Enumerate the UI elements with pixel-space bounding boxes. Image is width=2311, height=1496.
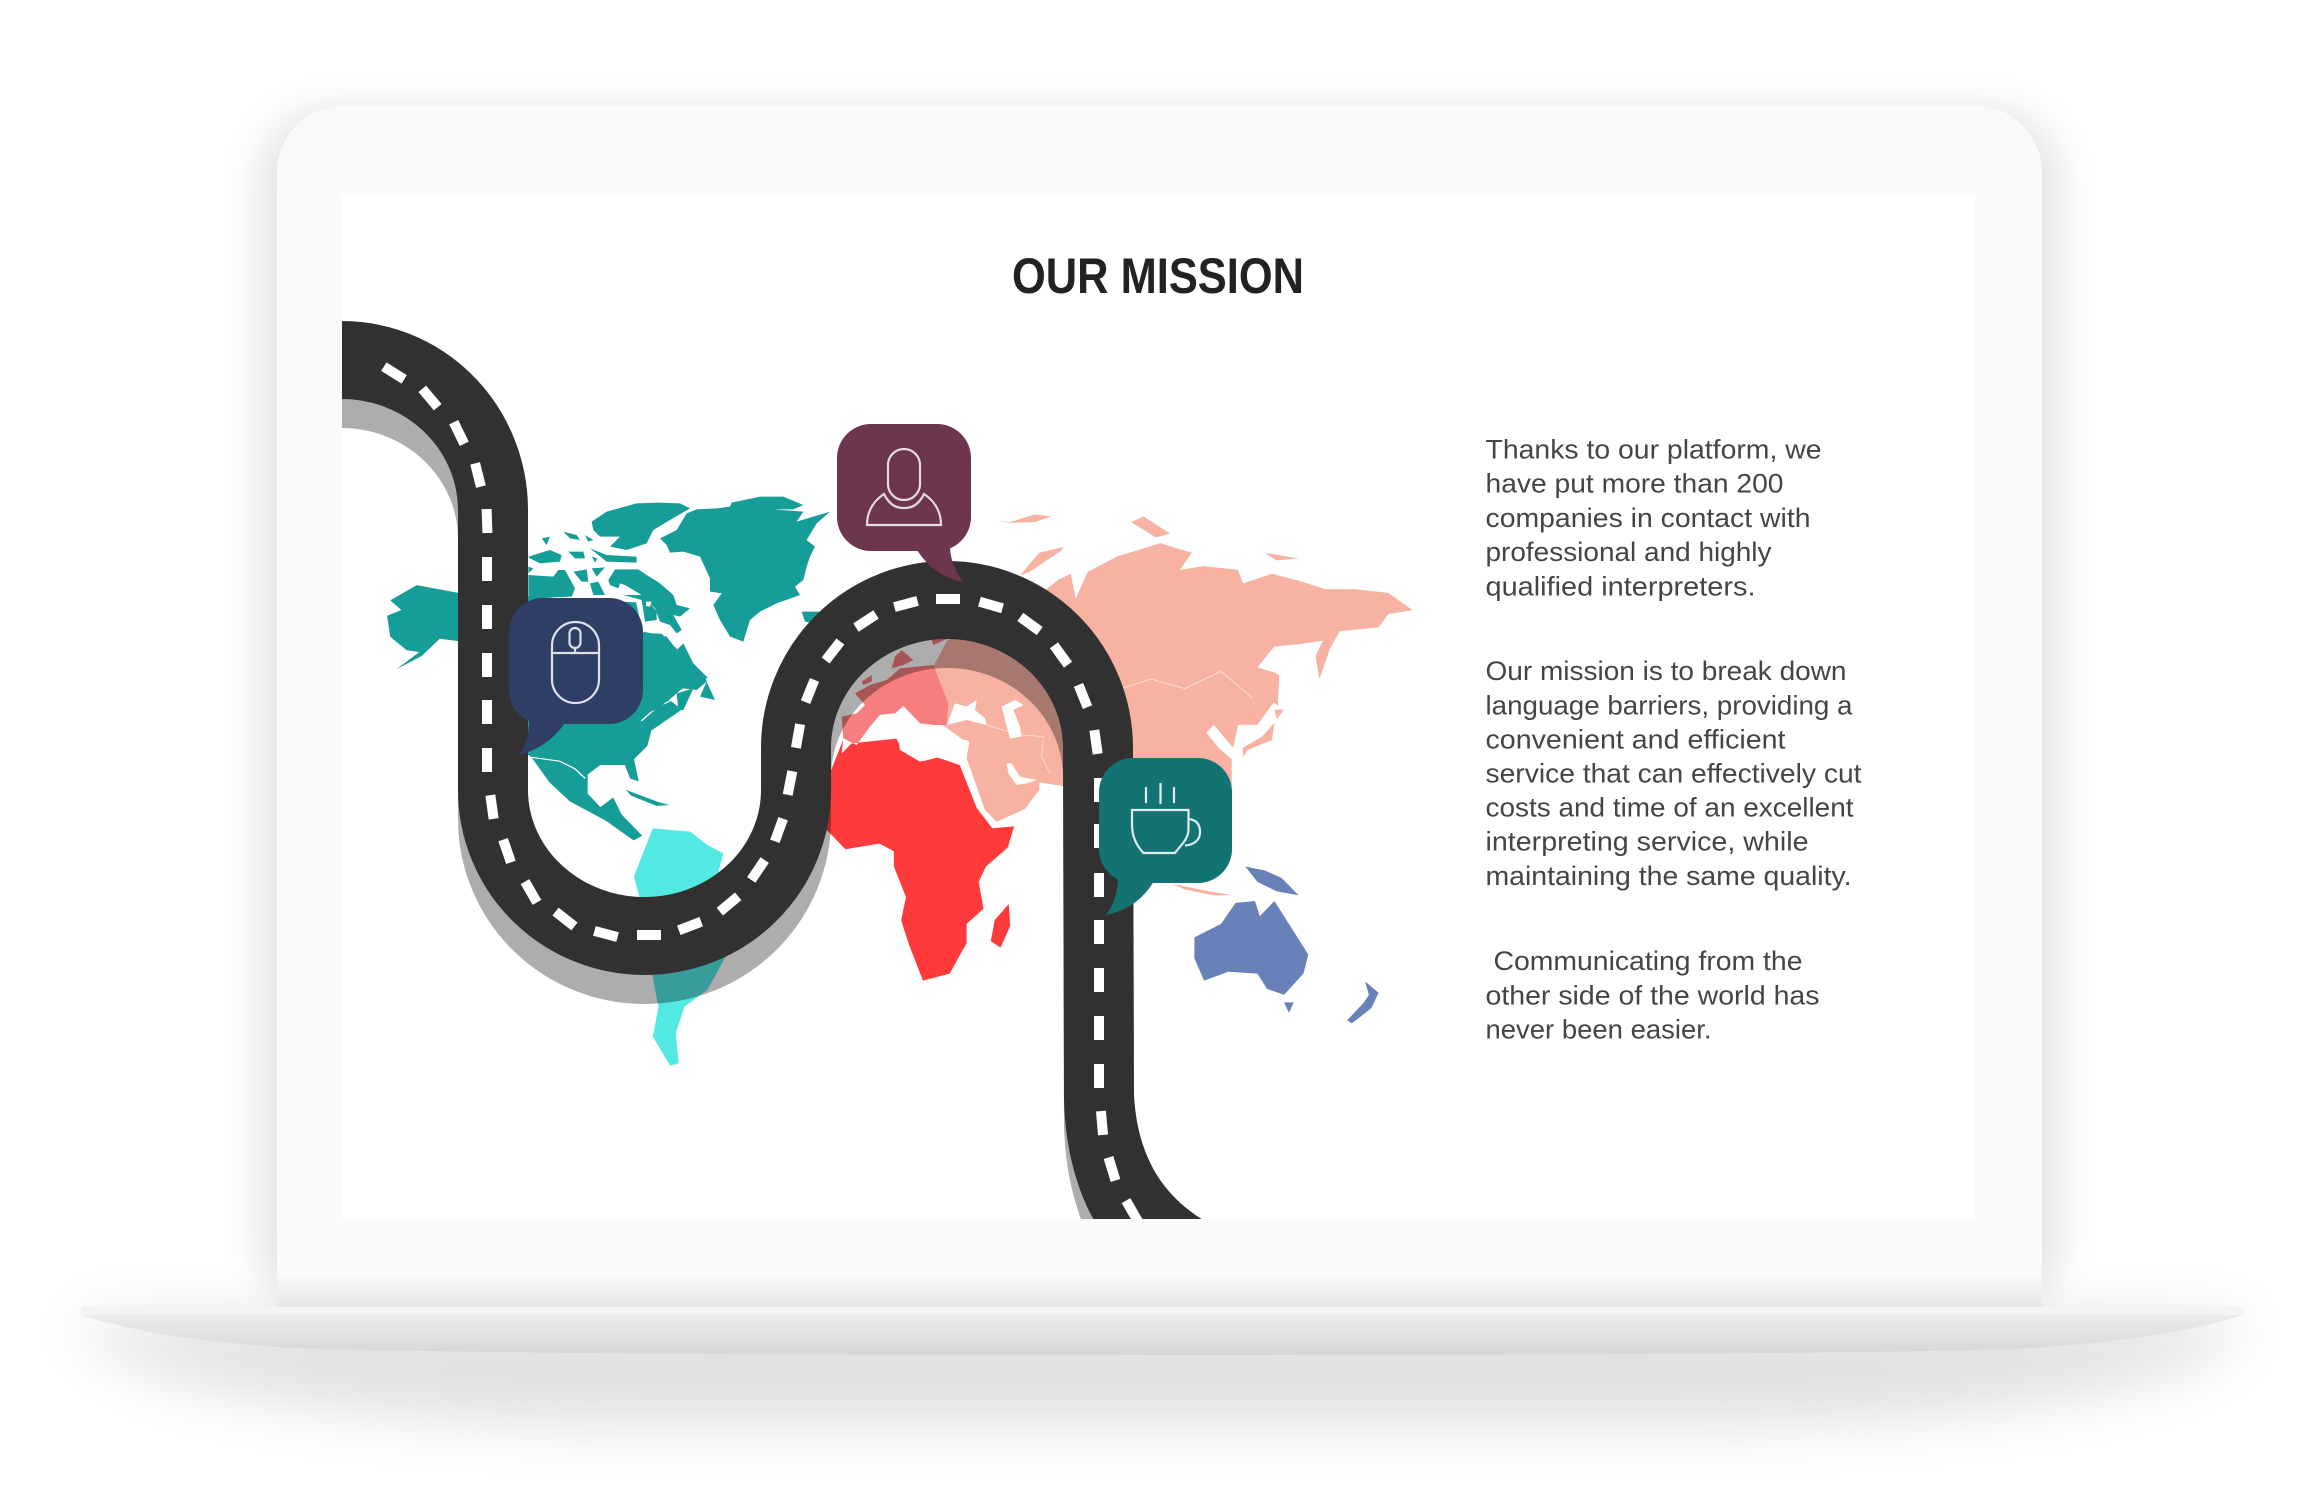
paragraph 3 — [1486, 946, 1820, 1044]
paragraph 2: costs and time of an excellent — [1486, 792, 1854, 822]
paragraph 3: other side of the world has — [1486, 980, 1820, 1010]
paragraph 1: Thanks to our platform, we — [1486, 434, 1822, 464]
paragraph 2: service that can effectively cut — [1486, 758, 1862, 788]
paragraph 1 — [1486, 434, 1822, 602]
world map — [387, 497, 1413, 1066]
paragraph 1: have put more than 200 — [1486, 468, 1784, 498]
laptop frame — [81, 106, 2243, 1355]
map: south america — [634, 828, 727, 1066]
paragraph 1: companies in contact with — [1486, 503, 1810, 533]
icon: coffee speech bubble — [1099, 758, 1232, 915]
laptop base — [81, 1307, 2243, 1355]
map: arctic canada, greenland, iceland — [528, 497, 830, 720]
map: africa — [825, 738, 1014, 981]
paragraph 2: convenient and efficient — [1486, 724, 1786, 754]
paragraph 2: Our mission is to break down — [1486, 656, 1846, 686]
paragraph 3: Communicating from the — [1494, 946, 1802, 976]
paragraph 2 — [1486, 656, 1862, 891]
road shadow — [330, 389, 1110, 1222]
text block: mission description — [1486, 434, 1862, 1044]
road surface — [330, 360, 1212, 1225]
road — [330, 360, 1212, 1225]
paragraph 2: interpreting service, while — [1486, 826, 1808, 856]
map: europe — [842, 638, 1050, 785]
paragraph 3: never been easier. — [1486, 1014, 1712, 1044]
icon: mouse speech bubble — [509, 598, 643, 755]
road lane dashes — [381, 362, 1142, 1224]
icon: computer mouse — [552, 622, 599, 703]
map: mediterranean and inland seas — [842, 700, 1037, 785]
map: north america mainland — [387, 585, 708, 840]
icon: person — [867, 449, 941, 525]
paragraph 2: language barriers, providing a — [1486, 690, 1853, 720]
paragraph 2: maintaining the same quality. — [1486, 861, 1852, 891]
map: asia, africa, oceania — [825, 514, 1413, 1023]
icon: coffee cup — [1132, 783, 1200, 853]
paragraph 1: qualified interpreters. — [1486, 572, 1756, 602]
screen — [342, 195, 1975, 1219]
title: OUR MISSION — [1012, 248, 1304, 304]
map: asia — [933, 514, 1413, 895]
icon: user speech bubble — [837, 424, 971, 582]
paragraph 1: professional and highly — [1486, 537, 1772, 567]
map: oceania — [1194, 867, 1379, 1023]
